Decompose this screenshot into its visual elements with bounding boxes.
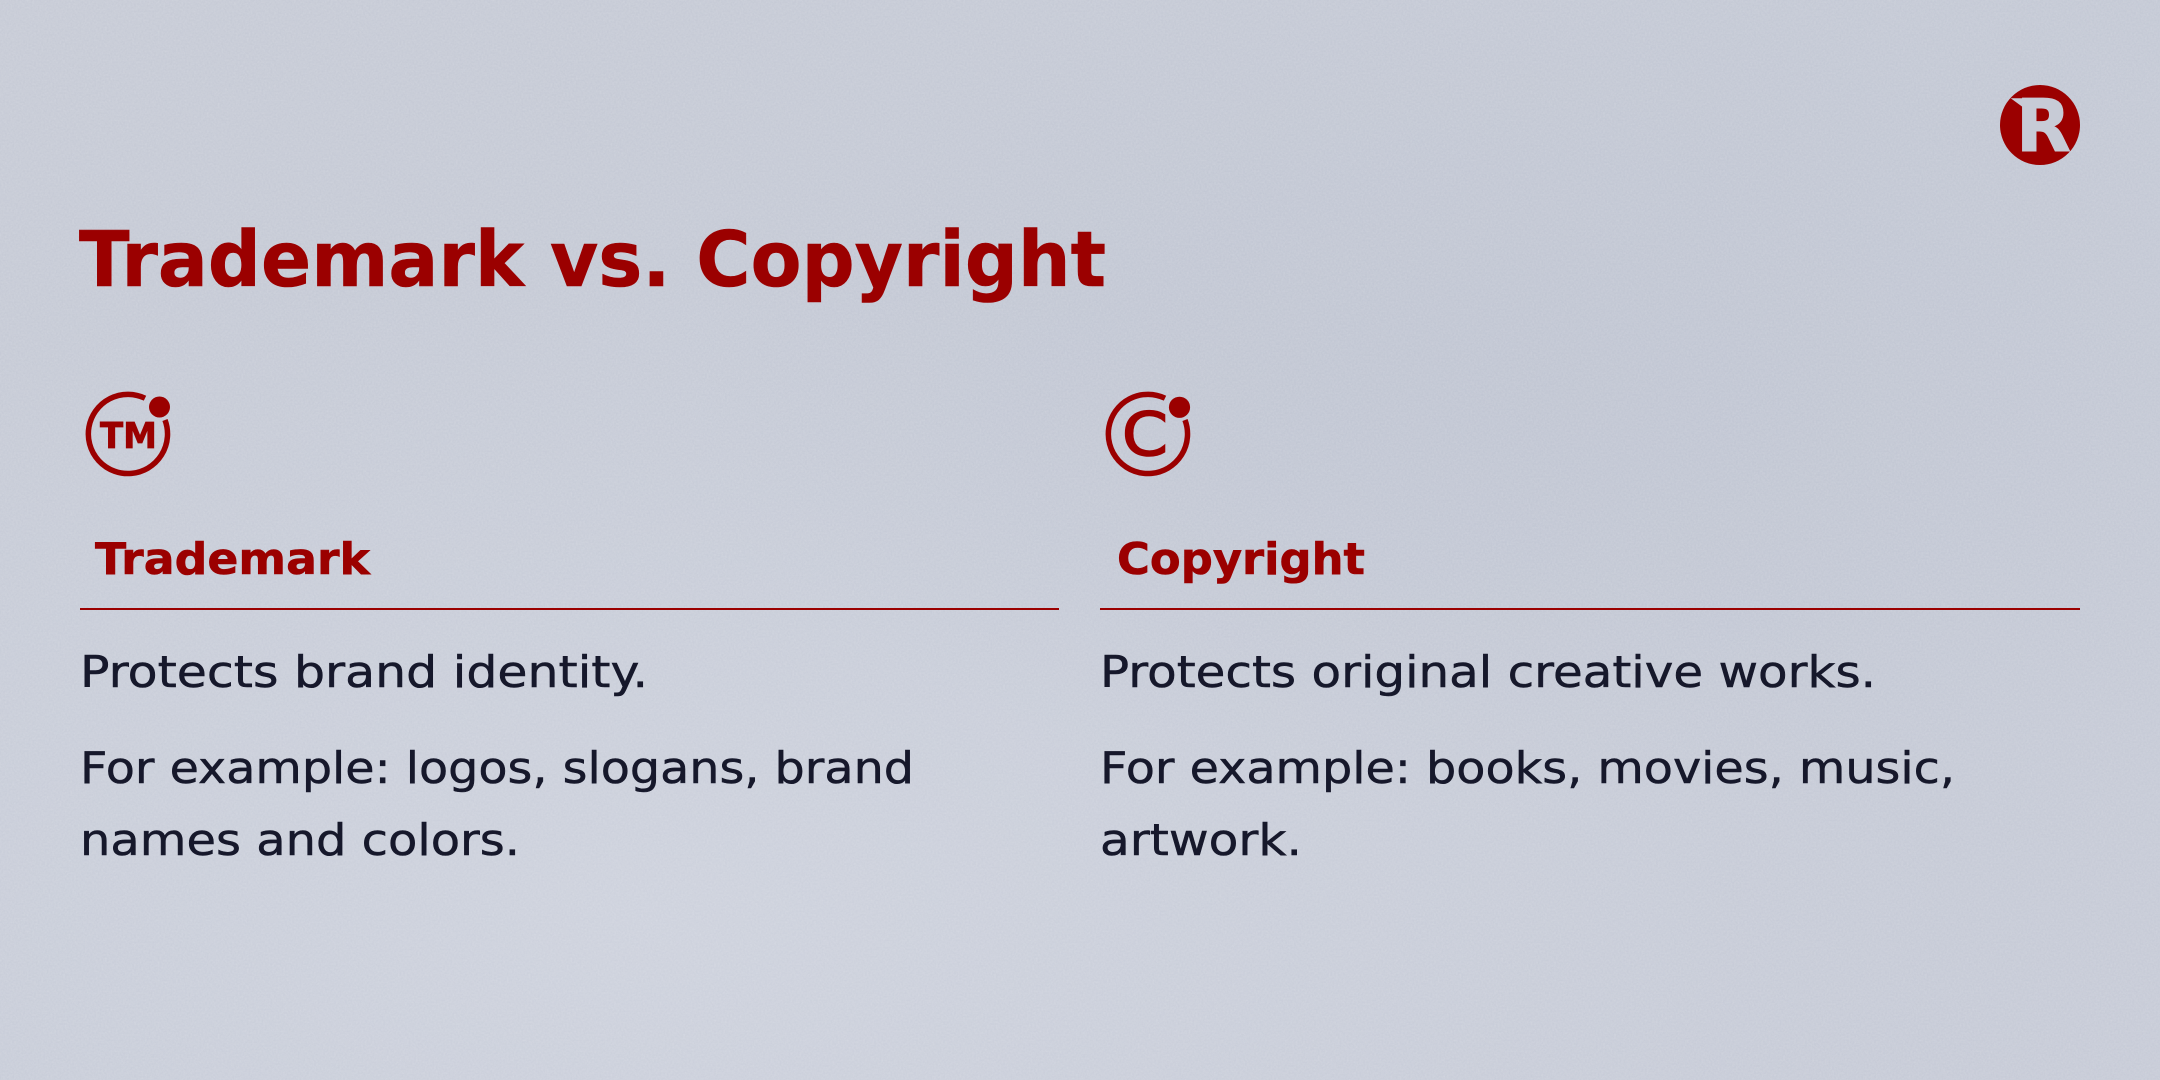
text: trademark examples [80,743,914,866]
divider line: trademark [80,608,1059,610]
icon: copyright symbol [1108,394,1190,474]
text: trademark examples: For example: logos, slogans, brand [80,743,914,794]
icon: brand logo [2000,84,2080,168]
text: copyright examples [1100,743,1955,866]
icon: trademark symbol [88,394,170,474]
panel: copyright [1100,394,2080,866]
icon: trademark symbol: TM [100,416,157,457]
text: copyright examples: artwork. [1100,815,1302,866]
heading: copyright: Copyright [1117,534,1365,585]
text: trademark definition: Protects brand identity. [80,647,648,698]
divider line: copyright [1100,608,2080,610]
text: copyright definition: Protects original creative works. [1100,647,1876,698]
heading: trademark: Trademark [95,534,372,585]
text: trademark examples: names and colors. [80,815,520,866]
icon: brand logo: R [2016,84,2071,168]
text: copyright examples: For example: books, movies, music, [1100,743,1955,794]
panel: trademark [80,394,1059,866]
title: Trademark vs. Copyright [79,216,1106,305]
icon: copyright symbol: C [1122,400,1168,470]
